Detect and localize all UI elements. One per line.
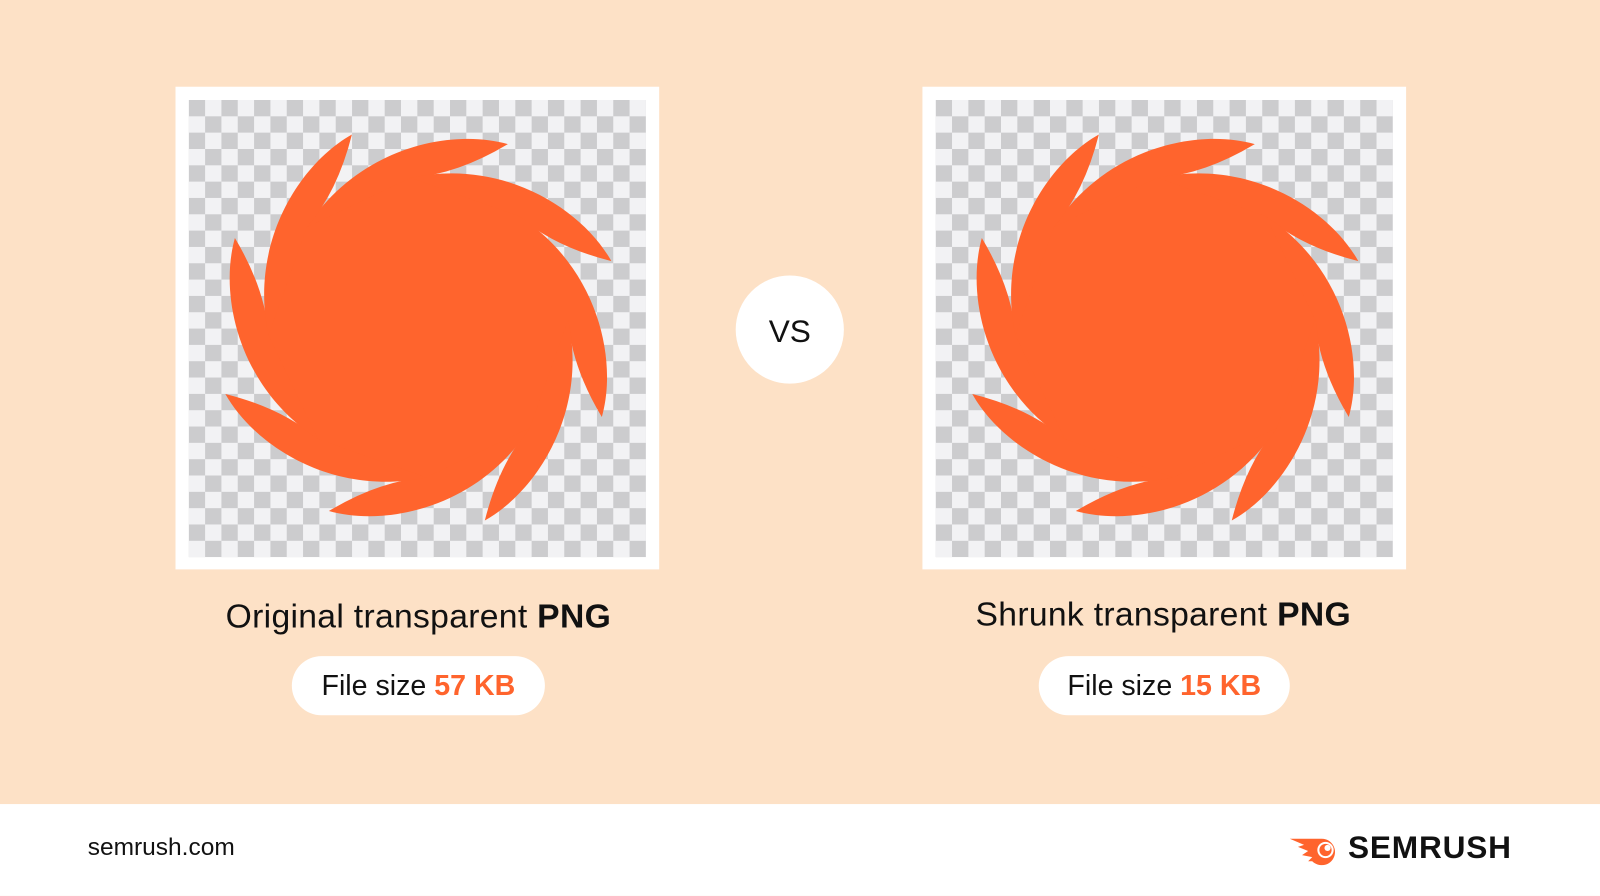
- pill: original file size: [292, 656, 545, 715]
- caption: original: Original transparent PNG: [226, 597, 611, 635]
- icon: swirl shrunk: [953, 115, 1378, 540]
- pill: shrunk file size: File size 15 KB: [1067, 669, 1261, 701]
- vs badge: VS: [769, 313, 811, 349]
- vs badge: [736, 276, 844, 384]
- footer url: semrush.com: [88, 834, 235, 861]
- panel: shrunk image: [922, 87, 1406, 569]
- footer: [0, 804, 1600, 896]
- icon: swirl original: [206, 115, 631, 540]
- pill: shrunk file size: [1039, 656, 1290, 715]
- icon: semrush flame: [1290, 838, 1335, 866]
- pill: original file size: File size 57 KB: [322, 669, 515, 701]
- logo: semrush: [1290, 830, 1512, 866]
- panel: original image: [176, 87, 659, 569]
- wordmark: SEMRUSH: [1348, 830, 1512, 865]
- caption: shrunk: Shrunk transparent PNG: [976, 595, 1351, 633]
